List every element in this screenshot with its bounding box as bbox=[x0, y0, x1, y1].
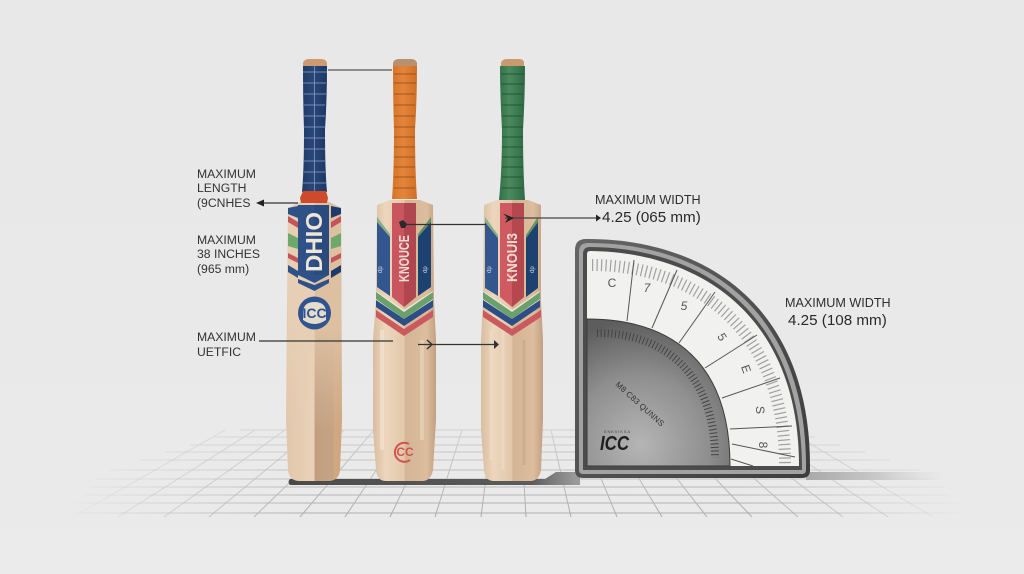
bat 2 top cap bbox=[393, 59, 417, 66]
bat 3 blade bbox=[481, 200, 543, 481]
bat 2 chevrons bbox=[376, 291, 433, 336]
gauge inner dial bbox=[587, 319, 730, 466]
bat 3 chevrons bbox=[483, 291, 541, 336]
floor shadow bbox=[288, 472, 946, 485]
protractor gauge bbox=[575, 239, 810, 478]
bat 2 panel name: KNOUCE bbox=[396, 235, 413, 282]
gauge outer tick scale bbox=[592, 265, 785, 464]
label: maximum width 108 mm: MAXIMUM WIDTH bbox=[785, 296, 891, 310]
bat 2 red logo: CC bbox=[396, 445, 414, 459]
connector: maximum uetfic bbox=[259, 340, 393, 342]
gauge scale labels: C bbox=[608, 276, 617, 290]
connector: top of handle bbox=[328, 69, 392, 71]
gauge scale labels bbox=[608, 276, 770, 449]
label: maximum width 065 mm: 4.25 (065 mm) bbox=[602, 209, 701, 226]
ICC logo: ENKVIKSA bbox=[604, 429, 630, 434]
label: maximum uetfic: UETFIC bbox=[197, 345, 241, 359]
bat 1: blue grip bbox=[286, 59, 342, 481]
label: maximum uetfic: MAXIMUM bbox=[197, 330, 256, 344]
bat 3 top cap bbox=[501, 59, 524, 66]
label: maximum width 065 mm: MAXIMUM WIDTH bbox=[595, 193, 701, 207]
gauge dial caption: M8 C83 QUNNS bbox=[614, 380, 666, 428]
connector: bat 2 to bat 3 bbox=[399, 220, 486, 228]
label: maximum width 065 mm bbox=[595, 193, 701, 226]
bat 2 red logo bbox=[395, 443, 414, 462]
bat 1 top cap bbox=[303, 59, 327, 66]
bat 3 blue side panels bbox=[485, 217, 538, 297]
gauge scale labels: 8 bbox=[756, 442, 770, 449]
label: maximum width 108 mm: 4.25 (108 mm) bbox=[788, 312, 887, 329]
ICC logo: ICC bbox=[600, 433, 629, 455]
bat 1 panel name: DHIO bbox=[301, 212, 327, 272]
bat 1 central panel bbox=[298, 205, 329, 291]
bat 2 blade bbox=[373, 200, 436, 481]
label: maximum 38 inches: (965 mm) bbox=[197, 262, 249, 276]
bat 3: green grip bbox=[481, 59, 543, 481]
bat 1 round logo bbox=[298, 296, 331, 330]
gauge scale labels: 7 bbox=[644, 281, 652, 295]
bat 3 blue side panels: dp bbox=[487, 266, 493, 273]
gauge spokes bbox=[627, 260, 795, 466]
gauge scale labels: 5 bbox=[714, 331, 730, 344]
bat 3 blue side panels: dp bbox=[530, 266, 536, 273]
bat 3 panel name: KNOUI3 bbox=[504, 233, 521, 282]
bat 2 red panel bbox=[392, 203, 416, 307]
bat 1 blade bbox=[286, 202, 342, 481]
gauge scale labels: E bbox=[738, 363, 754, 375]
bat 1 round logo: ICC bbox=[302, 305, 327, 321]
bat 1 red collar bbox=[300, 191, 328, 203]
label: maximum width 108 mm bbox=[785, 296, 891, 329]
bat 2: orange grip bbox=[373, 59, 436, 481]
bat 2 blue side panels: dp bbox=[378, 266, 384, 273]
bat 1 side stripes bbox=[288, 206, 341, 278]
gauge scale labels: S bbox=[753, 406, 767, 414]
bat 3 grip bbox=[499, 66, 525, 200]
label: maximum 38 inches: 38 INCHES bbox=[197, 247, 260, 261]
label: maximum length: (9CNHES bbox=[197, 196, 250, 210]
gauge frame bbox=[575, 239, 810, 478]
bat 3 red panel bbox=[500, 203, 524, 307]
arrow: between bats 2 and 3 bbox=[418, 340, 499, 349]
bat 2 grip bbox=[392, 66, 417, 199]
gauge face bbox=[587, 251, 799, 466]
arrow: maximum width bbox=[503, 214, 601, 223]
label: maximum length: LENGTH bbox=[197, 181, 246, 195]
bat 2 blue side panels bbox=[377, 217, 431, 296]
label: maximum 38 inches: MAXIMUM bbox=[197, 233, 256, 247]
bat 1 grip bbox=[302, 66, 327, 192]
gauge scale labels: 5 bbox=[681, 299, 688, 313]
label: maximum length: MAXIMUM bbox=[197, 167, 256, 181]
bat 2 blue side panels: dp bbox=[423, 266, 429, 273]
arrow: maximum length bbox=[256, 200, 298, 206]
perspective floor grid bbox=[70, 430, 965, 517]
gauge inner tick scale bbox=[597, 333, 715, 458]
